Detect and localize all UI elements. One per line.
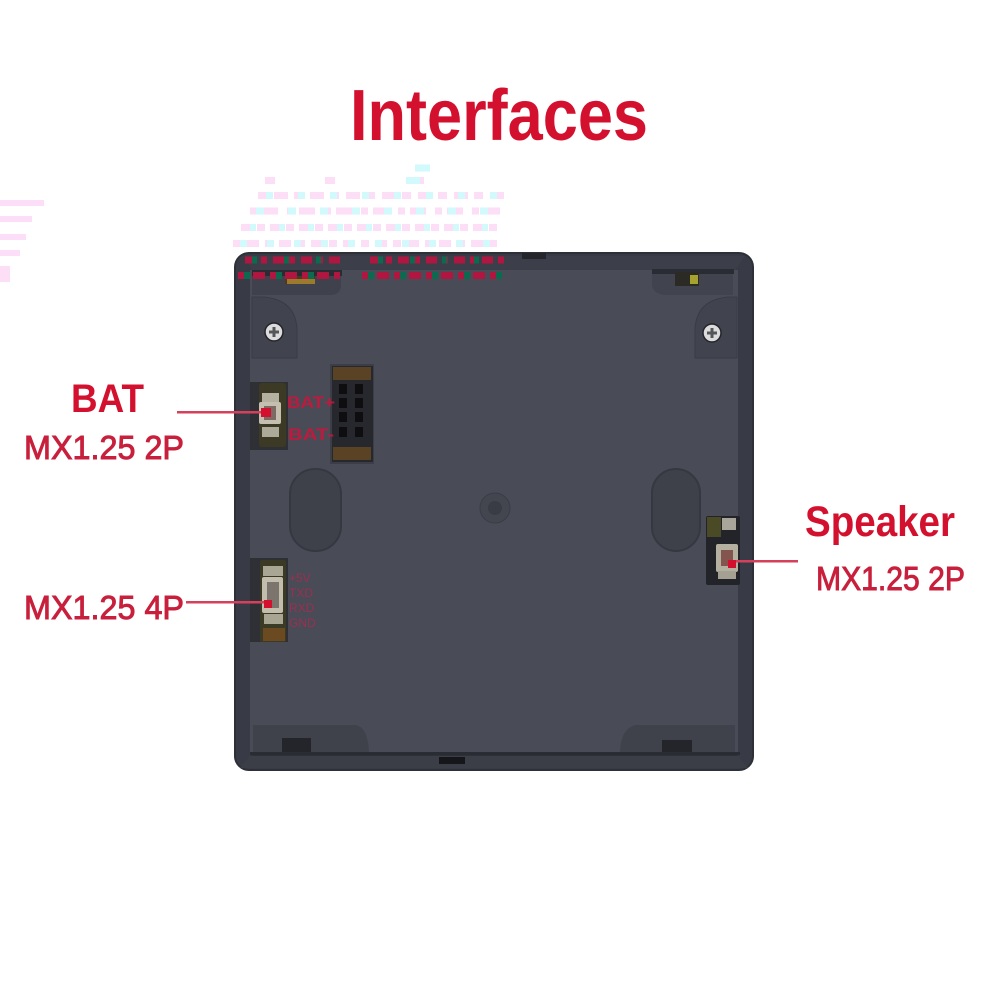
silk labels: UART pins: RXD	[289, 601, 315, 615]
silk labels: battery polarity: BAT+	[287, 393, 335, 412]
silk labels: UART pins: TXD	[289, 586, 313, 600]
screw bosses	[252, 297, 297, 358]
callout: BAT: MX1.25 2P	[24, 429, 184, 466]
main plate	[250, 270, 738, 754]
JST connector	[262, 393, 279, 403]
silk labels: UART pins: +5V	[289, 571, 311, 585]
silk labels: UART pins: GND	[289, 616, 316, 630]
centre post	[480, 493, 510, 523]
title: Interfaces	[350, 76, 648, 156]
battery connector recess	[250, 382, 288, 450]
silk labels: battery polarity	[287, 393, 335, 444]
screw: right	[703, 324, 721, 342]
speaker connector recess	[706, 516, 740, 585]
silk labels: UART pins	[289, 571, 316, 630]
mounting slot: left	[290, 469, 341, 551]
mounting slot: right	[652, 469, 700, 551]
IDC header	[330, 364, 374, 464]
silk labels: battery polarity: BAT-	[288, 425, 334, 444]
UART connector recess	[250, 558, 288, 642]
screw: left	[265, 323, 283, 341]
device outer shell	[235, 253, 753, 770]
top left clip	[252, 276, 341, 295]
callout: MX1.25 4P	[24, 589, 272, 626]
faint ghost text artefacts	[0, 168, 504, 274]
callout: Speaker: MX1.25 2P	[816, 560, 965, 597]
device: back cover	[235, 253, 753, 770]
callout: Speaker	[728, 498, 965, 597]
inner rim shading	[251, 270, 738, 756]
bottom clips	[253, 725, 369, 752]
ghost text overlay: red and green bands on device top edge	[238, 260, 505, 276]
top right clip	[652, 272, 733, 295]
callout: MX1.25 4P: MX1.25 4P	[24, 589, 184, 626]
callout: BAT	[24, 377, 271, 466]
callout: BAT: BAT	[71, 377, 144, 421]
callout: Speaker: Speaker	[805, 498, 955, 546]
